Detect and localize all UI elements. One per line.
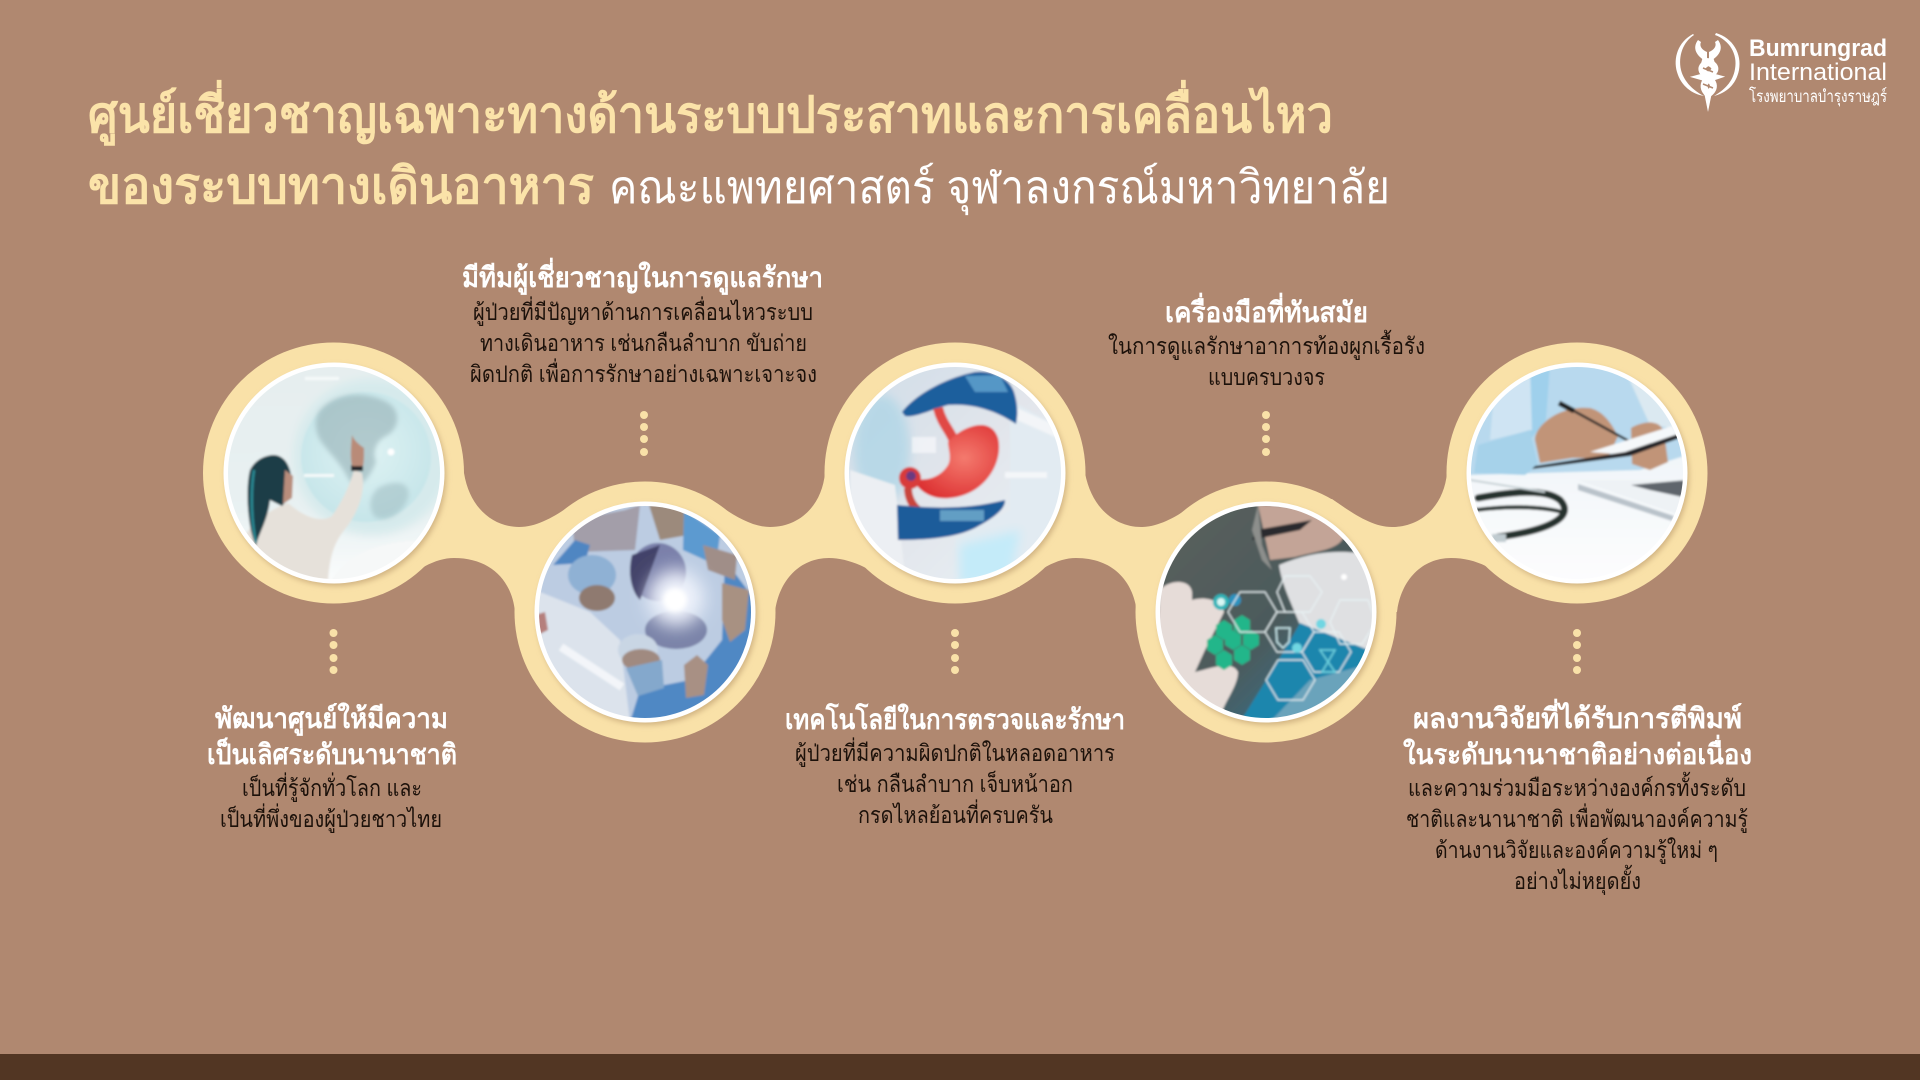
connector dots 5 (1573, 629, 1581, 674)
text block 1: เป็นที่รู้จักทั่วโลก และ (242, 772, 422, 802)
text block 4: แบบครบวงจร (1208, 364, 1325, 390)
photo 4: gloved hand with medical hexagons (1156, 502, 1376, 722)
green hexagons (1207, 615, 1259, 670)
text block 4 (1108, 292, 1425, 390)
text block 1: พัฒนาศูนย์ให้มีความ (215, 702, 448, 736)
bottom bar (0, 1054, 1920, 1080)
head and hair (248, 455, 292, 546)
circle shadows (226, 366, 1689, 725)
logo: Bumrungrad (1749, 35, 1887, 62)
esophagus and stomach (938, 408, 955, 444)
text block 5: ด้านงานวิจัยและองค์ความรู้ใหม่ ๆ (1435, 837, 1718, 864)
logo: โรงพยาบาลบำรุงราษฎร์ (1749, 86, 1887, 107)
photo 2: surgeons from below (534, 502, 756, 722)
hand (1535, 408, 1618, 463)
wave connector band (203, 342, 1708, 742)
glove (1156, 582, 1238, 712)
photo 3: stomach between gloved hands (844, 362, 1066, 585)
logo (1676, 33, 1887, 112)
upper glove (902, 372, 1017, 424)
text block 1 (207, 702, 457, 833)
surgeon heads (568, 555, 616, 595)
pen (1559, 403, 1574, 411)
text block 3: กรดไหลย้อนที่ครบครัน (858, 799, 1053, 828)
text block 3: เทคโนโลยีในการตรวจและรักษา (785, 702, 1125, 735)
icon: caduceus emblem (1676, 33, 1740, 112)
text block 1: เป็นเลิศระดับนานาชาติ (207, 737, 457, 770)
connector dots 1 (330, 629, 338, 674)
connector dots 3 (951, 629, 959, 674)
text block 2: ผิดปกติ เพื่อการรักษาอย่างเฉพาะเจาะจง (470, 358, 817, 387)
clipboard paper (1590, 426, 1678, 455)
text block 4: ในการดูแลรักษาอาการท้องผูกเรื้อรัง (1108, 330, 1425, 360)
text block 5: ในระดับนานาชาติอย่างต่อเนื่อง (1403, 734, 1752, 770)
text block 2: มีทีมผู้เชี่ยวชาญในการดูแลรักษา (462, 257, 823, 295)
laptop (1578, 480, 1687, 522)
clipboard edge (1532, 434, 1680, 469)
text block 3: เช่น กลืนลำบาก เจ็บหน้าอก (837, 769, 1073, 797)
title: ศูนย์เชี่ยวชาญเฉพาะทางด้านระบบประสาทและการเคลื่อนไหว (88, 80, 1333, 146)
lower glove (897, 500, 1005, 540)
cream circles (203, 342, 1708, 742)
text block 2 (462, 257, 823, 387)
hexagon network (1228, 576, 1376, 700)
photo 1: woman touching globe (224, 362, 450, 600)
arm and watch (351, 465, 363, 471)
text block 2: ทางเดินอาหาร เช่นกลืนลำบาก ขับถ่าย (480, 330, 807, 356)
title (88, 80, 1390, 216)
logo: International (1749, 59, 1887, 86)
connector dots 2 (640, 411, 648, 456)
text block 3: ผู้ป่วยที่มีความผิดปกติในหลอดอาหาร (795, 737, 1115, 767)
connector dots 4 (1262, 411, 1270, 456)
text block 5: และความร่วมมือระหว่างองค์กรทั้งระดับ (1408, 772, 1746, 801)
text block 5 (1403, 698, 1752, 895)
text block 5: ผลงานวิจัยที่ได้รับการตีพิมพ์ (1413, 698, 1742, 734)
text block 5: อย่างไม่หยุดยั้ง (1514, 865, 1641, 895)
title: คณะแพทยศาสตร์ จุฬาลงกรณ์มหาวิทยาลัย (609, 161, 1390, 216)
text block 3 (785, 702, 1125, 828)
text block 5: ชาติและนานาชาติ เพื่อพัฒนาองค์ความรู้ (1406, 803, 1748, 833)
title: ของระบบทางเดินอาหาร (88, 158, 594, 214)
cuff (1474, 430, 1538, 475)
photo 5: doctor writing on clipboard with stethoscope (1466, 362, 1688, 584)
stethoscope (1476, 492, 1564, 537)
sweater (246, 469, 364, 579)
text block 1: เป็นที่พึ่งของผู้ป่วยชาวไทย (220, 803, 442, 833)
text block 4: เครื่องมือที่ทันสมัย (1165, 292, 1368, 328)
text block 2: ผู้ป่วยที่มีปัญหาด้านการเคลื่อนไหวระบบ (473, 296, 813, 326)
